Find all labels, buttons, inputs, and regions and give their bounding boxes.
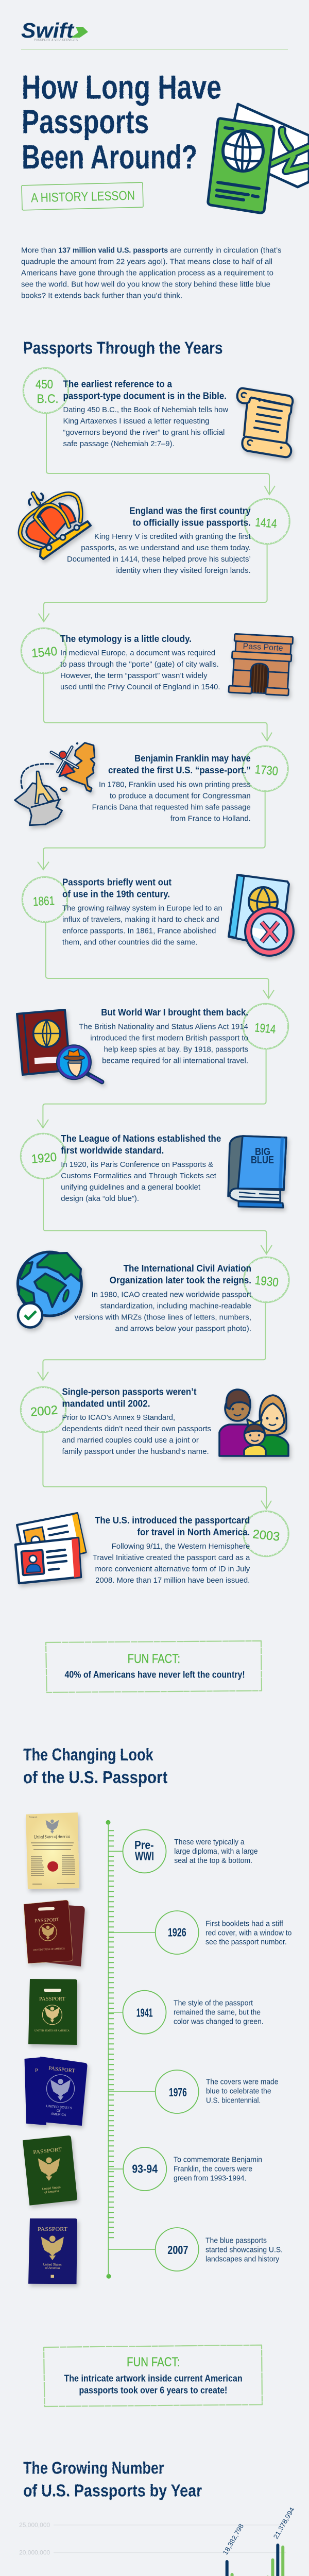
timeline entry: 1976 (108, 2070, 278, 2113)
title: Been Around? (22, 138, 197, 176)
timeline entry: pre-wwi (108, 1829, 258, 1873)
text: the earliest reference: safe passage (Nehemiah 2:7–9). (63, 440, 175, 448)
text: passport card: more convenient alternative form of ID in July (95, 1565, 250, 1573)
text: england first country: England was the first country (129, 505, 251, 516)
text: the earliest reference (63, 379, 229, 448)
timeline entry: pre-wwi: seal at the top & bottom. (174, 1857, 252, 1865)
stamp: 1920: 1920 (31, 1150, 57, 1166)
stamp: 1920 (21, 1133, 66, 1179)
heading: the growing number: The Growing Number (23, 2459, 164, 2478)
image: blue passport 2007: of America (45, 2267, 60, 2270)
stamp: 2002 (21, 1387, 66, 1432)
callout: fun fact artwork: The intricate artwork inside current American (64, 2373, 243, 2384)
text: ICAO: and arrows below your passport photo). (115, 1325, 251, 1333)
timeline entry: 1976: The covers were made (206, 2078, 278, 2086)
text: single-person passports: Prior to ICAO’s Annex 9 Standard, (62, 1414, 175, 1422)
stamp: 1861: 1861 (32, 894, 55, 909)
text: benjamin franklin: Francis Dana that requested him safe passage (92, 803, 251, 811)
callout: fun fact 40 percent: FUN FACT: (128, 1652, 180, 1666)
stamp: 450 B.C.: B.C. (37, 392, 59, 406)
text: the earliest reference: “governors beyond the river” to grant his official (63, 429, 225, 437)
logo: Swift header: Swift (21, 19, 75, 42)
logo: Swift header: PASSPORT & VISA SERVICES (34, 38, 78, 42)
callout: fun fact artwork (44, 2345, 262, 2406)
text: england first country (67, 505, 251, 575)
image: blue passports 1976: OF (56, 2109, 61, 2113)
stamp: 1730 (243, 746, 288, 791)
icon: red passport with spy magnifier (17, 1010, 102, 1082)
callout: fun fact artwork: FUN FACT: (127, 2355, 180, 2369)
timeline entry: 1976: 1976 (169, 2086, 187, 2099)
timeline entry: 2007 (108, 2228, 283, 2271)
text: world war I: introduced the first modern British passport to (90, 1034, 248, 1042)
icon: crown (20, 494, 91, 559)
stamp: 1414 (244, 499, 290, 544)
image: blue passport 2007 (28, 2218, 77, 2284)
text: passports out of use: The growing railway system in Europe led to an (62, 904, 222, 912)
text: league of nations: In 1920, its Paris Conference on Passports & (61, 1161, 213, 1169)
stamp: 1730: 1730 (254, 762, 279, 778)
timeline entry: 93-94: Franklin, the covers were (174, 2165, 252, 2173)
timeline entry: 2007: started showcasing U.S. (205, 2246, 283, 2254)
image: red passports 1926 (24, 1900, 85, 1967)
bar chart: passports by year: 21,378,994 (272, 2506, 296, 2540)
text: etymology: In medieval Europe, a document was required (60, 649, 215, 657)
text: passports out of use: influx of travelers, making it hard to check and (62, 916, 219, 924)
text: passport card: Travel Initiative created the passport card as a (93, 1554, 250, 1562)
stamp: 1914: 1914 (254, 1021, 276, 1037)
image: green passport 93-94 (23, 2136, 77, 2206)
connector 1 (46, 414, 275, 495)
callout: fun fact 40 percent: 40% of Americans have never left the country! (65, 1669, 245, 1680)
timeline entry: 93-94: green from 1993-1994. (174, 2174, 246, 2182)
heading: the changing look: The Changing Look (23, 1745, 153, 1764)
timeline entry: 2007: The blue passports (205, 2236, 267, 2245)
text: league of nations: unifying guidelines and a general booklet (61, 1183, 200, 1192)
text: benjamin franklin: created the first U.S. “passe-port.” (108, 765, 251, 775)
text: world war I (79, 1007, 248, 1065)
timeline entry: 1976: blue to celebrate the (206, 2087, 271, 2095)
icon: big blue book: BLUE (251, 1155, 274, 1166)
image: diploma passport: Passport (29, 1816, 38, 1818)
text: single-person passports: dependents didn’t need their own passports (62, 1425, 211, 1433)
text: england first country: to officially issue passports. (133, 517, 251, 528)
text: passports out of use: of use in the 19th century. (62, 888, 170, 899)
text: etymology: However, the term “passport” wasn’t widely (60, 672, 208, 680)
text: benjamin franklin: Benjamin Franklin may have (134, 753, 251, 764)
bar chart: passports by year: 25,000,000 (19, 2521, 50, 2529)
image: blue passports 1976 (25, 2057, 88, 2126)
text: etymology: to pass through the "porte" (gate) of city walls. (60, 660, 219, 669)
timeline entry: 93-94 (108, 2147, 262, 2191)
timeline entry: 1926 (108, 1911, 291, 1954)
timeline entry: 1941: The style of the passport (174, 1999, 253, 2008)
image: diploma passport: United States of America (34, 1834, 70, 1840)
icon: globe with check (18, 1252, 81, 1327)
timeline entry: pre-wwi: WWI (135, 1850, 154, 1863)
icon: big blue book (228, 1136, 286, 1208)
stamp: 1930 (244, 1257, 289, 1302)
text: the earliest reference: passport-type document is in the Bible. (63, 390, 227, 401)
connector 8 (38, 1303, 266, 1380)
intro paragraph: see the world. But how well do you know the story behind these little blue (21, 280, 270, 289)
text: england first country: Documented in 1414, these helped prove his subjects’ (67, 555, 251, 564)
stamp: a history lesson: A HISTORY LESSON (31, 189, 135, 205)
text: league of nations (61, 1133, 221, 1203)
text: the earliest reference: King Artaxerxes I issued a letter requesting (63, 417, 209, 426)
icon: passport with plane ticket (208, 104, 309, 213)
timeline entry: pre-wwi: large diploma, with a large (174, 1848, 258, 1856)
timeline entry: 1976: U.S. bicentennial. (206, 2096, 261, 2105)
bar chart: passports by year (19, 2506, 296, 2576)
stamp: 1540 (21, 628, 67, 674)
icon: big blue book: BIG (255, 1146, 270, 1158)
text: ICAO (75, 1263, 251, 1333)
title: Passports (22, 103, 149, 140)
icon: passport cards (15, 1513, 85, 1583)
timeline entry: 1941: 1941 (136, 2006, 153, 2019)
connector 4 (38, 792, 265, 870)
icon: scroll (237, 388, 293, 457)
image: green passport 1941: UNITED STATES OF AMERICA (35, 2029, 70, 2032)
timeline entry: 1926: 1926 (168, 1925, 186, 1939)
intro paragraph: are currently in circulation (that’s (170, 246, 281, 255)
heading: the changing look (23, 1745, 167, 1787)
intro paragraph (21, 246, 281, 300)
connector 9 (43, 1433, 271, 1509)
text: ICAO: Organization later took the reigns. (110, 1275, 251, 1285)
text: benjamin franklin: to produce a document for Congressman (110, 792, 251, 800)
text: benjamin franklin: In 1780, Franklin used his own printing press (99, 781, 251, 789)
text: england first country: identity when they visited foreign lands. (116, 567, 251, 575)
text: passports out of use (62, 876, 222, 946)
text: passport card: Following 9/11, the Western Hemisphere (112, 1543, 250, 1551)
image: blue passports 1976: UNITED STATES (46, 2105, 73, 2110)
text: passports out of use: Passports briefly went out (62, 876, 171, 887)
connector 6 (37, 1049, 266, 1128)
stamp: 2002: 2002 (30, 1403, 58, 1419)
image: blue passports 1976: AMERICA (51, 2112, 66, 2117)
text: etymology: used until the Privy Council of England in 1540. (60, 683, 220, 691)
image: green passport 1941 (28, 1979, 77, 2045)
text: the earliest reference: The earliest reference to a (63, 379, 173, 389)
connector 2 (39, 545, 267, 622)
image: green passport 93-94: United States (42, 2186, 61, 2191)
text: ICAO: In 1980, ICAO created new worldwide passport (92, 1291, 251, 1299)
image: blue passport 2007: United States (43, 2264, 62, 2267)
text: the earliest reference: Dating 450 B.C., the Book of Nehemiah tells how (63, 406, 229, 414)
stamp: 2003 (243, 1511, 289, 1557)
text: ICAO: versions with MRZs (those lines of letters, numbers, (75, 1313, 251, 1321)
image: red passports 1926: PASSPORT (35, 1918, 59, 1924)
timeline ruler (106, 1820, 114, 2279)
text: single-person passports: mandated until 2002. (62, 1398, 150, 1409)
text: league of nations: Customs Formalities and Through Tickets set (61, 1172, 216, 1180)
stamp: 450 B.C. (23, 368, 69, 413)
image: blue passport 2007: PASSPORT (38, 2227, 68, 2232)
text: passports out of use: enforce passports. In 1861, France abolished (62, 927, 216, 935)
intro paragraph: 137 million valid U.S. passports (58, 246, 168, 255)
icon: france and holland map (15, 743, 95, 825)
timeline entry: 1926: red cover, with a window to (205, 1929, 291, 1937)
stamp: 2003: 2003 (252, 1527, 281, 1544)
image: diploma passport (26, 1812, 79, 1889)
text: league of nations: The League of Nations established the (61, 1133, 221, 1144)
icon: family (219, 1389, 288, 1456)
image: blue passports 1976: P (35, 2068, 38, 2074)
text: etymology (60, 633, 220, 691)
bar chart: passports by year: 18,382,798 (221, 2522, 245, 2556)
text: etymology: The etymology is a little cloudy. (60, 633, 192, 644)
timeline entry: 2007: 2007 (167, 2243, 188, 2257)
text: league of nations: design (aka “old blue”). (61, 1195, 139, 1203)
heading: the changing look: of the U.S. Passport (23, 1768, 167, 1787)
stamp: 1414: 1414 (254, 515, 278, 531)
text: ICAO: standardization, including machine-readable (100, 1302, 251, 1310)
intro paragraph: Americans have gone through the application process as a requirement to (21, 269, 273, 278)
text: england first country: King Henry V is credited with granting the first (94, 533, 251, 541)
intro paragraph: quadruple the amount from 22 years ago!). That means close to half of all (21, 258, 272, 266)
text: benjamin franklin (92, 753, 251, 823)
image: blue passports 1976: PASSPORT (48, 2065, 76, 2074)
intro paragraph: More than (21, 246, 56, 255)
text: ICAO: The International Civil Aviation (124, 1263, 251, 1274)
timeline entry: 93-94: To commemorate Benjamin (174, 2156, 262, 2164)
timeline entry: 93-94: 93-94 (132, 2162, 158, 2175)
text: passport card: 2008. More than 17 million have been issued. (95, 1577, 250, 1585)
stamp: a history lesson (22, 182, 143, 210)
text: benjamin franklin: from France to Holland. (170, 815, 251, 823)
text: single-person passports: Single-person passports weren’t (62, 1386, 197, 1397)
heading: the growing number: of U.S. Passports by Year (23, 2481, 202, 2500)
image: green passport 93-94: PASSPORT (33, 2147, 62, 2156)
text: world war I: But World War I brought them back. (101, 1007, 248, 1018)
timeline entry: pre-wwi: Pre- (134, 1838, 153, 1852)
timeline entry: pre-wwi: These were typically a (174, 1838, 245, 1846)
text: passport card: The U.S. introduced the passportcard (95, 1515, 250, 1526)
text: single-person passports (62, 1386, 211, 1456)
icon: pass porte gate: Pass Porte (243, 642, 283, 653)
stamp: 1930: 1930 (254, 1274, 279, 1290)
text: passport card: for travel in North America. (137, 1527, 250, 1537)
heading: passports through the years: Passports Through the Years (23, 338, 222, 358)
text: league of nations: first worldwide standard. (61, 1145, 164, 1156)
connector 7 (43, 1179, 272, 1254)
timeline entry: 1926: see the passport number. (205, 1938, 287, 1946)
text: passports out of use: them, and other countries did the same. (62, 938, 198, 946)
callout: fun fact artwork: passports took over 6 years to create! (79, 2385, 227, 2396)
stamp: 1861 (22, 877, 68, 922)
callout: fun fact 40 percent (46, 1641, 262, 1692)
heading: the growing number (23, 2459, 202, 2500)
title (22, 69, 221, 176)
text: single-person passports: and married couples could use a joint or (62, 1436, 199, 1445)
title: How Long Have (22, 69, 221, 106)
image: red passports 1926: UNITED STATES OF AMERICA (33, 1947, 65, 1952)
text: single-person passports: family passport under the husband’s name. (62, 1448, 209, 1456)
timeline entry: 1941 (108, 1991, 264, 2034)
bar chart: passports by year: 20,000,000 (19, 2549, 50, 2556)
intro paragraph: books? It extends back further than you’d think. (21, 292, 182, 300)
icon: pass porte gate (229, 634, 293, 696)
text: world war I: The British Nationality and Status Aliens Act 1914 (79, 1023, 248, 1031)
text: england first country: passports, as we understand and use them today. (81, 544, 251, 552)
text: world war I: became required for all international travel. (102, 1057, 248, 1065)
image: green passport 1941: PASSPORT (39, 1996, 65, 2002)
stamp: 1540: 1540 (31, 645, 58, 660)
icon: crossed-out passport (229, 875, 294, 956)
stamp: 1914 (243, 1004, 288, 1049)
stamp: 450 B.C.: 450 (36, 378, 53, 392)
text: passport card (93, 1515, 250, 1585)
connector 3 (44, 674, 272, 741)
timeline entry: 1941: remained the same, but the (174, 2009, 261, 2017)
connector 5 (46, 923, 274, 998)
image: green passport 93-94: of America (44, 2190, 60, 2194)
timeline entry: 1941: color was changed to green. (174, 2018, 264, 2026)
text: world war I: help keep spies at bay. By 1918, passports (104, 1045, 248, 1054)
timeline entry: 1926: First booklets had a stiff (205, 1920, 284, 1928)
timeline entry: 2007: landscapes and history (205, 2255, 280, 2263)
